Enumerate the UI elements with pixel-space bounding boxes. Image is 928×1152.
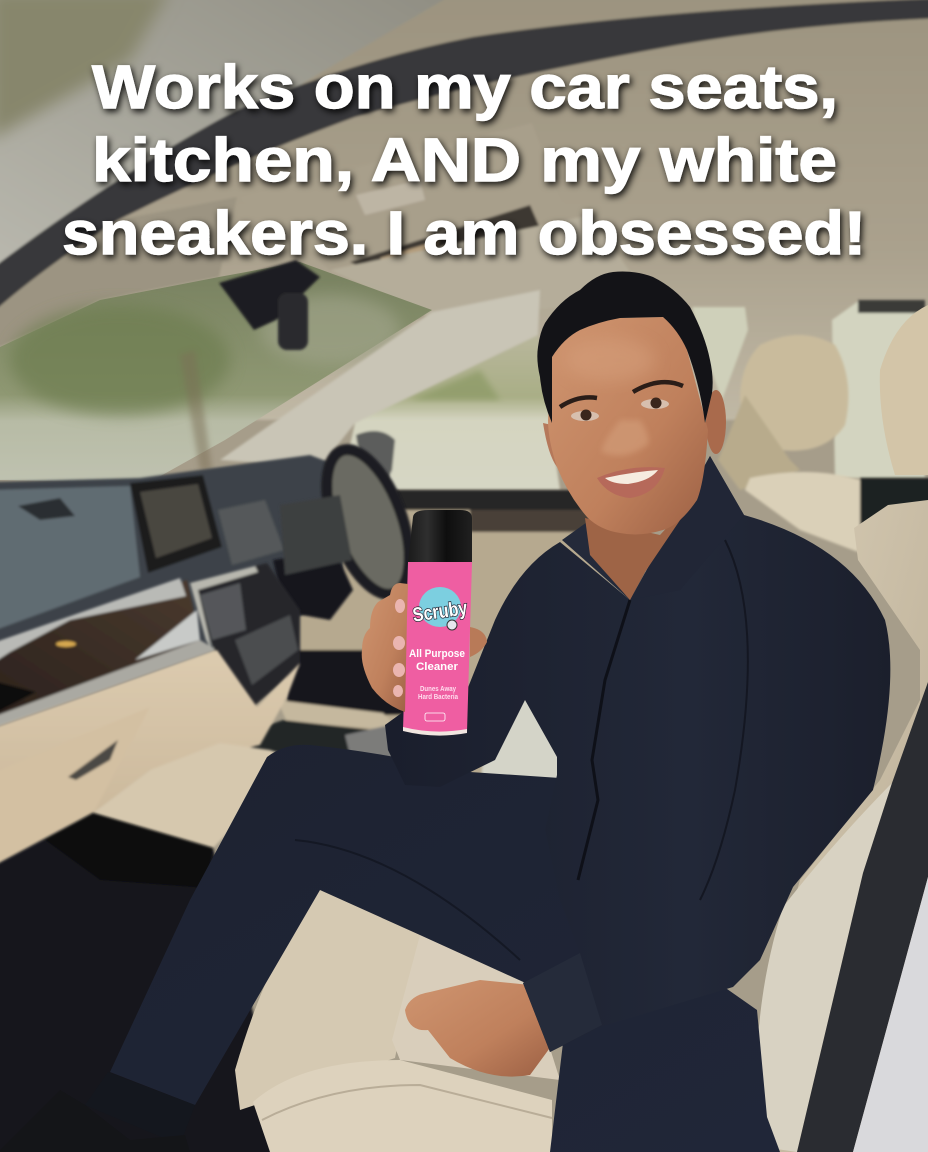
footwell bbox=[0, 813, 290, 1152]
icon: rear-view mirror bbox=[219, 260, 320, 350]
product can: logo cloud: Scruby bbox=[411, 597, 469, 627]
wood trim and air vents bbox=[0, 563, 300, 730]
driver door and console bbox=[217, 490, 600, 800]
lower dashboard panel bbox=[0, 650, 300, 868]
man: head bbox=[543, 317, 726, 534]
rear seat headrest and backrest bbox=[718, 335, 928, 552]
man: hand holding can bbox=[362, 583, 487, 712]
product can: pink body bbox=[403, 562, 472, 736]
side window bbox=[220, 290, 925, 490]
product can: logo cloud bbox=[411, 587, 469, 630]
dashboard bbox=[0, 455, 350, 735]
background: car roof lining bbox=[0, 0, 928, 420]
product can: label text bbox=[409, 648, 465, 721]
title: kitchen, AND my white bbox=[92, 126, 837, 194]
product can: label text: All Purpose bbox=[409, 648, 465, 660]
man: neck bbox=[585, 495, 697, 600]
title: sneakers. I am obsessed! bbox=[62, 199, 866, 267]
man: smile bbox=[597, 467, 665, 498]
car door pillar bbox=[797, 682, 928, 1152]
title: Works on my car seats, bbox=[92, 53, 838, 121]
product can: cap bbox=[408, 510, 472, 563]
windscreen bbox=[0, 262, 432, 483]
product can: label text: Cleaner bbox=[416, 661, 459, 673]
man: shoe bbox=[0, 1090, 190, 1152]
man: nose bbox=[602, 420, 648, 456]
product can: label text: Hard Bacteria bbox=[418, 694, 458, 701]
front passenger seat bbox=[235, 305, 928, 1152]
steering wheel bbox=[273, 439, 426, 620]
man: resting hand bbox=[405, 980, 552, 1077]
man: hair bbox=[537, 272, 713, 423]
man: jacket bbox=[385, 456, 890, 1052]
title bbox=[62, 53, 866, 267]
man: eyebrows and eyes bbox=[560, 382, 683, 421]
man: trousers bbox=[85, 745, 780, 1152]
product can: label text: Dunes Away bbox=[420, 686, 456, 693]
